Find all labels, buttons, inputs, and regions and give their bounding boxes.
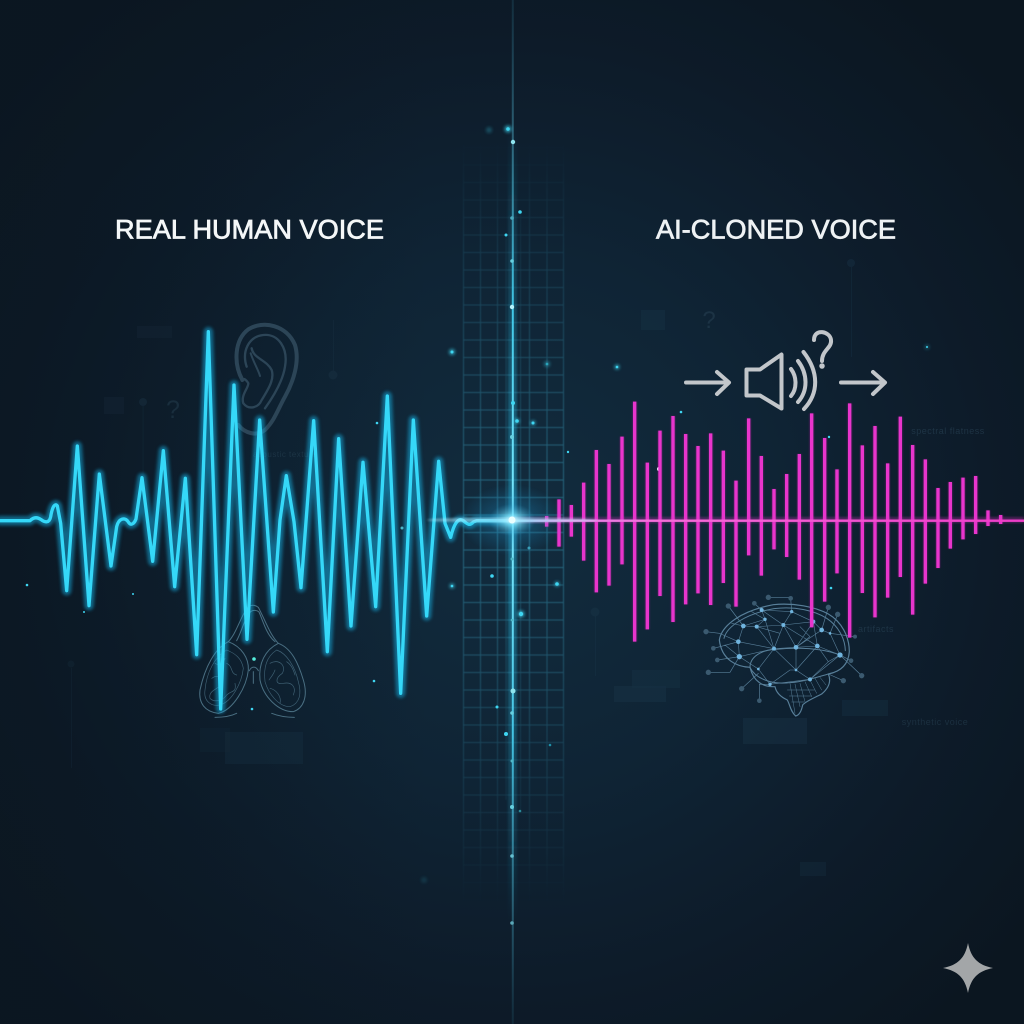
icon: ear <box>237 325 297 434</box>
faint background ghost elements: right <box>590 259 985 876</box>
question mark <box>814 332 831 368</box>
faint background ghost elements: left: acoustic texture <box>253 450 317 459</box>
title: AI-cloned voice: AI-CLONED VOICE <box>656 214 896 244</box>
horizontal axis line and center flare <box>427 484 1024 556</box>
icon: lungs <box>200 605 305 717</box>
faint background ghost elements: left <box>68 320 338 768</box>
icon: sparkle watermark <box>943 943 993 993</box>
bars <box>547 402 1001 642</box>
speaker <box>746 352 815 409</box>
bars glow <box>547 402 1001 642</box>
waveform stroke <box>0 332 512 709</box>
faint background ghost elements: right: ? <box>702 307 716 334</box>
waveform glow <box>0 332 512 709</box>
icon: speaker with question mark and arrows <box>686 332 885 409</box>
faint background ghost elements: left: ? <box>166 396 180 424</box>
magenta bars: AI-cloned voice <box>547 402 1001 642</box>
title: real human voice: REAL HUMAN VOICE <box>115 214 384 244</box>
faint background ghost elements: right: spectral flatness <box>911 426 985 436</box>
center divider line <box>508 0 517 1024</box>
particle dots <box>26 126 929 925</box>
icon: brain network <box>703 595 864 716</box>
faint background ghost elements: right: artifacts <box>858 624 894 634</box>
faint background ghost elements: right: synthetic voice <box>902 717 968 727</box>
arrow right <box>841 372 885 394</box>
arrow left <box>686 372 729 394</box>
center grid <box>462 199 564 848</box>
blue waveform: real human voice <box>0 332 512 709</box>
